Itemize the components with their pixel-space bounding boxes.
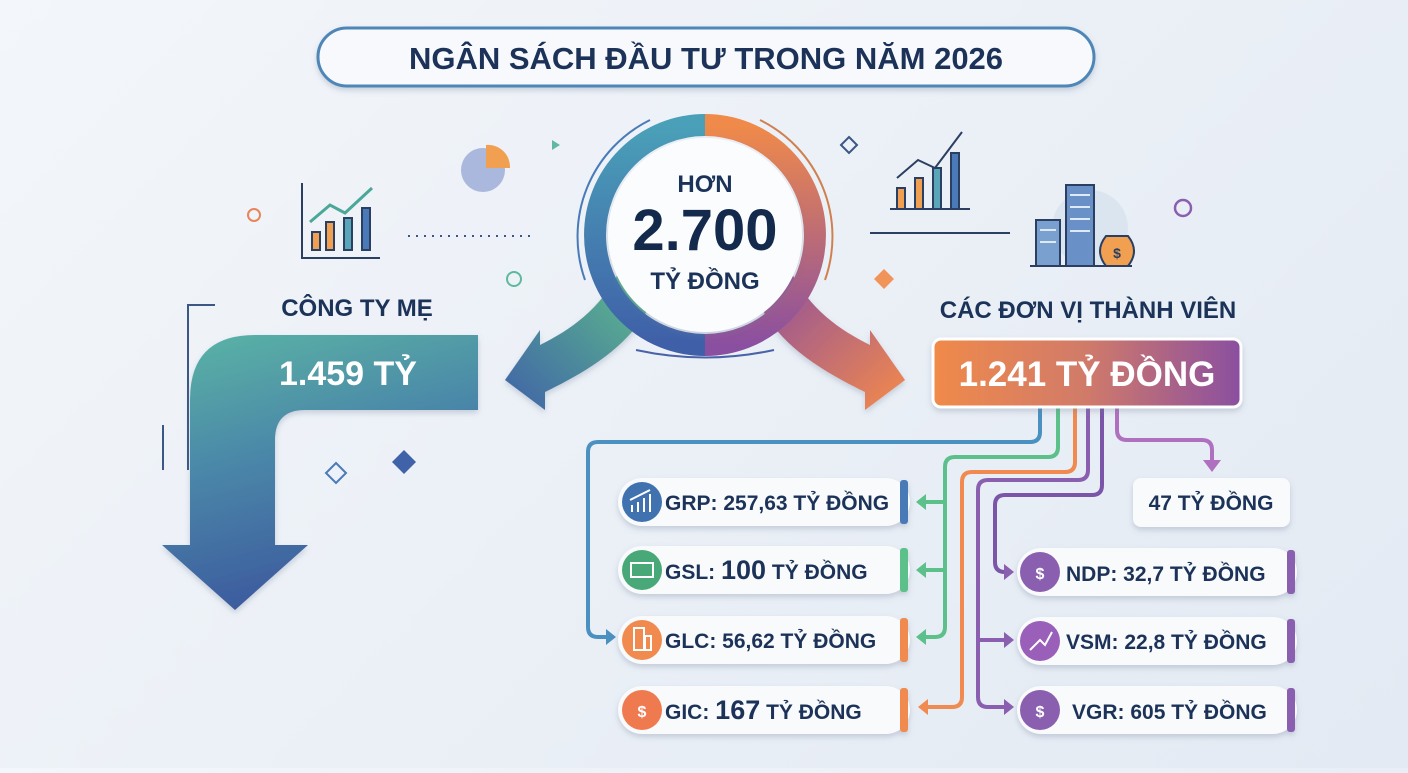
arrow: right sweep xyxy=(760,270,905,410)
center: hub xyxy=(505,120,905,410)
card: NDP: NDP: 32,7 TỶ ĐỒNG xyxy=(1066,562,1266,586)
card: GSL: GSL: 100 TỶ ĐỒNG xyxy=(665,555,868,585)
card: GIC: $ xyxy=(638,704,647,721)
icon: buildings with money bag xyxy=(1030,185,1134,266)
arrow: parent company L xyxy=(162,335,478,610)
card: GIC xyxy=(618,686,910,734)
card: VSM xyxy=(1017,617,1297,665)
icon: pie chart xyxy=(461,145,510,192)
card: VGR: VGR: 605 TỶ ĐỒNG xyxy=(1072,700,1267,724)
icon: left chart xyxy=(302,183,380,258)
connectors xyxy=(588,405,1221,715)
card: 47 tỷ: 47 TỶ ĐỒNG xyxy=(1149,491,1273,515)
decorations xyxy=(163,137,1191,483)
center: hub: 2.700 xyxy=(632,198,778,263)
card: GLC: GLC: 56,62 TỶ ĐỒNG xyxy=(665,629,876,653)
card: 47 tỷ xyxy=(1133,478,1290,527)
title: NGÂN SÁCH ĐẦU TƯ TRONG NĂM 2026 xyxy=(409,40,1003,76)
card: GLC xyxy=(618,616,910,664)
card: VGR xyxy=(1017,686,1297,734)
total box: 1.241 xyxy=(933,339,1241,407)
arrow: parent company L: 1.459 TỶ xyxy=(279,355,417,393)
card: NDP xyxy=(1017,548,1297,596)
card: GIC: GIC: 167 TỶ ĐỒNG xyxy=(665,695,862,725)
card: NDP: $ xyxy=(1036,566,1045,583)
icon: buildings with money bag: $ xyxy=(1113,245,1121,261)
card: GRP xyxy=(618,478,910,526)
card: GRP: GRP: 257,63 TỶ ĐỒNG xyxy=(665,491,889,515)
heading: các đơn vị: CÁC ĐƠN VỊ THÀNH VIÊN xyxy=(940,296,1236,324)
card: VSM: VSM: 22,8 TỶ ĐỒNG xyxy=(1066,630,1267,654)
arrow: left sweep xyxy=(505,270,650,410)
card: GSL xyxy=(618,546,910,594)
total box: 1.241: 1.241 TỶ ĐỒNG xyxy=(959,354,1215,394)
icon: right chart xyxy=(890,132,970,209)
heading: công ty mẹ: CÔNG TY MẸ xyxy=(281,294,433,322)
center: hub: TỶ ĐỒNG xyxy=(650,266,760,295)
title xyxy=(318,28,1094,86)
center: hub: HƠN xyxy=(677,171,733,198)
card: VGR: $ xyxy=(1036,704,1045,721)
